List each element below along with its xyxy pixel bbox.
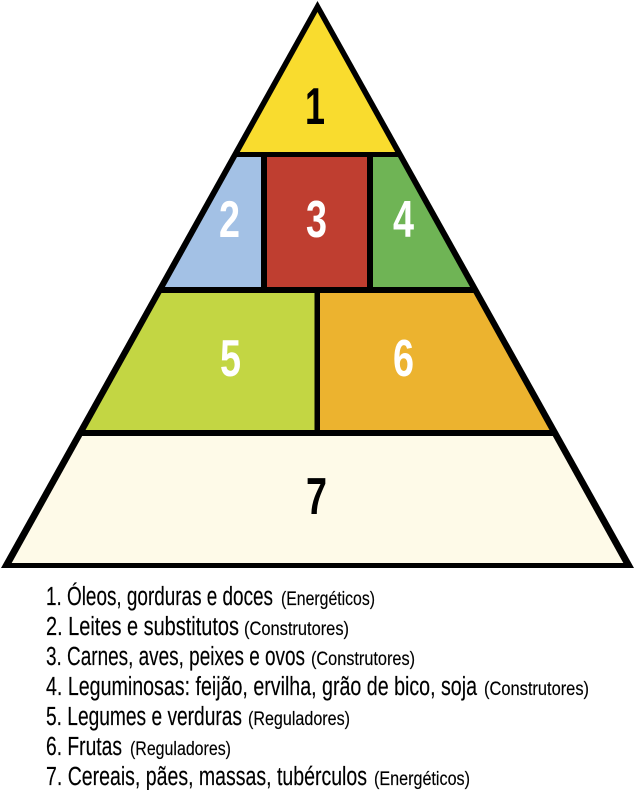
legend item 6 (46, 733, 231, 761)
tier 3: red section (267, 157, 367, 287)
tier 5: lime section (86, 293, 314, 430)
legend item 4: (Construtores) (484, 679, 589, 700)
number 1: 1 (305, 78, 325, 136)
legend item 4: 4. Leguminosas: feijão, ervilha, grão de bico, soja (46, 673, 478, 701)
tier 7: cream base (12, 436, 623, 563)
legend item 3: 3. Carnes, aves, peixes e ovos (46, 643, 305, 671)
tier 2: blue section (165, 157, 261, 287)
tier 6: orange section (320, 293, 550, 430)
legend item 1: (Energéticos) (281, 589, 375, 610)
number 5: 5 (220, 330, 241, 388)
legend item 6: 6. Frutas (46, 733, 122, 761)
legend item 2: (Construtores) (244, 619, 349, 640)
number 7: 7 (306, 468, 327, 526)
legend list (46, 582, 589, 790)
tier 1: yellow apex (240, 12, 395, 152)
legend item 7: (Energéticos) (374, 769, 470, 790)
pyramid outline (1, 1, 634, 568)
food pyramid (1, 1, 634, 568)
tier 4: green section (373, 157, 470, 287)
number 3: 3 (306, 191, 327, 249)
legend item 2: 2. Leites e substitutos (46, 613, 239, 641)
legend item 5: (Reguladores) (248, 709, 350, 730)
legend item 5: 5. Legumes e verduras (46, 703, 242, 731)
legend item 1: 1. Óleos, gorduras e doces (46, 582, 273, 611)
legend item 3: (Construtores) (311, 649, 415, 670)
legend item 6: (Reguladores) (130, 739, 231, 760)
number 2: 2 (219, 191, 240, 249)
number 4: 4 (393, 191, 414, 249)
number 6: 6 (393, 330, 414, 388)
